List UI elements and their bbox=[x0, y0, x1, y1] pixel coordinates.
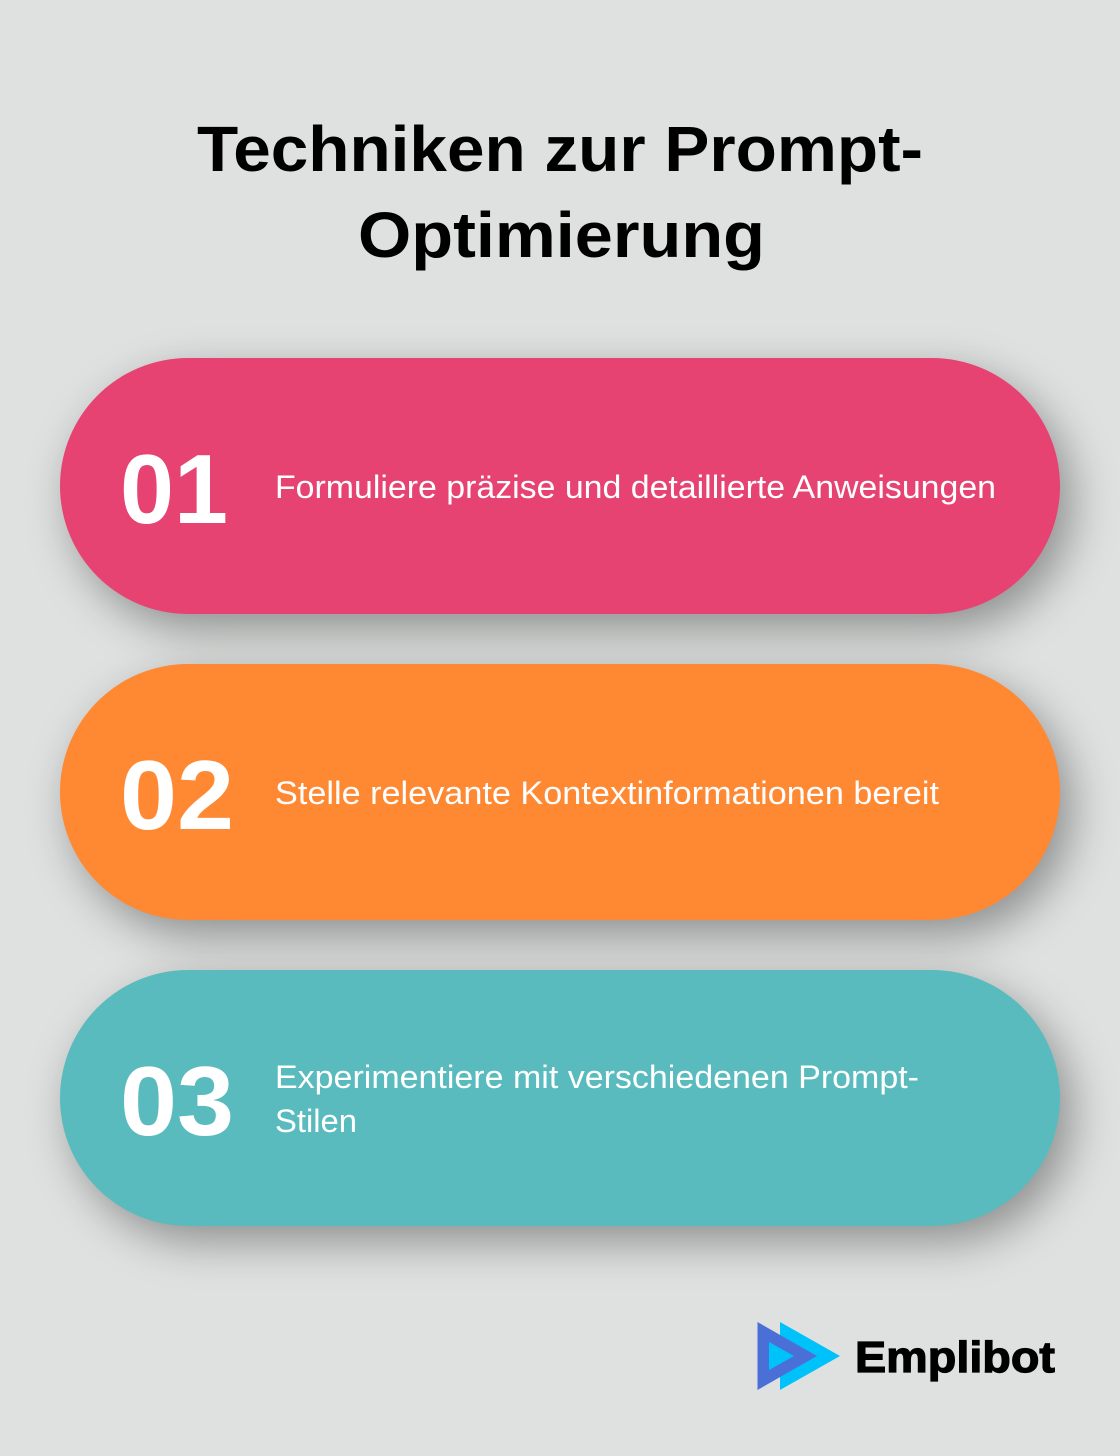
title bbox=[197, 113, 923, 271]
number 03: 03 bbox=[120, 1046, 234, 1156]
number 01: 01 bbox=[120, 434, 228, 544]
logo: Emplibot bbox=[758, 1322, 1055, 1390]
text: step 03: Stilen bbox=[275, 1103, 357, 1139]
title: Optimierung bbox=[358, 199, 765, 271]
icon: play triangles bbox=[758, 1322, 840, 1390]
number 02: 02 bbox=[120, 740, 234, 850]
text: step 02: Stelle relevante Kontextinformationen bereit bbox=[275, 775, 939, 811]
text: step 01: Formuliere präzise und detaillierte Anweisungen bbox=[275, 469, 996, 505]
panel: step 01 pill bbox=[60, 358, 1060, 614]
text: step 03: Experimentiere mit verschiedenen Prompt- bbox=[275, 1059, 919, 1095]
panel: step 03 pill bbox=[60, 970, 1060, 1226]
title: Techniken zur Prompt- bbox=[197, 113, 923, 185]
logo wordmark: Emplibot bbox=[855, 1333, 1055, 1382]
text: step 03 bbox=[275, 1059, 919, 1139]
panel: step 02 pill bbox=[60, 664, 1060, 920]
